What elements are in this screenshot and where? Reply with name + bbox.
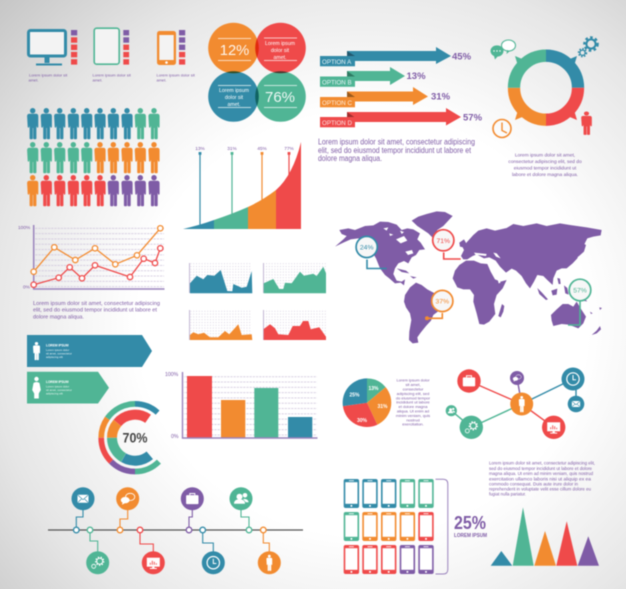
panel: bar chart — [165, 372, 318, 440]
caption: phone: Lorem ipsum dolor sit — [156, 72, 195, 78]
pin: 37%: 37% — [435, 298, 449, 306]
text: blue circle: amet. — [228, 102, 240, 108]
panel: phone grid — [344, 479, 487, 574]
text: pie paragraph: Lorem ipsum dolor — [396, 378, 430, 382]
stems and labels: 31% — [227, 146, 238, 152]
panel: small area charts — [190, 263, 326, 340]
ring: inner segments — [103, 405, 167, 470]
text: arrow paragraph: dolore magna aliqua. — [318, 154, 382, 163]
text: female banner — [46, 380, 72, 396]
panel: male banner — [27, 335, 152, 367]
timeline nodes — [74, 527, 266, 533]
icon: gears — [579, 37, 598, 57]
bracket — [436, 479, 448, 574]
area segments — [183, 142, 301, 229]
text: ring caption: labore et dolore magna aliqua. — [512, 172, 578, 178]
node: clock — [562, 368, 584, 390]
pie labels: 31% — [377, 404, 388, 410]
panel: ring with icons — [490, 37, 598, 178]
text: triangle paragraph: exercitation ullamco laboris nisi ut aliquip ex ea — [489, 476, 591, 481]
text: female banner: LOREM IPSUM — [46, 380, 69, 384]
stat: 25%: 25% — [454, 513, 486, 533]
text: female banner: Lorem ipsum dolor — [46, 384, 69, 388]
text: female banner: sit amet, consectetur — [46, 388, 72, 392]
pin: 57%: 57% — [573, 288, 587, 294]
panel: overlapping venn circles — [208, 23, 306, 122]
node: gears — [460, 416, 483, 439]
stat: 70%: 70% — [122, 431, 148, 446]
icon: smartphone — [157, 31, 176, 65]
caption: tablet: Lorem ipsum dolor sit — [92, 72, 131, 78]
text: triangle paragraph: commodo consequat. Duis aute irure dolor in — [489, 481, 578, 486]
pin: 24%: 24% — [360, 244, 374, 252]
text: arrow paragraph — [318, 138, 475, 163]
chart: green area — [264, 263, 326, 293]
squares: monitor legend — [71, 30, 77, 65]
text: blue circle: dolor sit — [225, 95, 244, 101]
panel: line chart — [18, 225, 164, 320]
pin: 57% — [568, 279, 591, 325]
arrow: option C — [320, 87, 451, 107]
text: triangle paragraph: magna aliqua. Ut enim ad minim veniam, quis nostrud — [489, 471, 593, 476]
text: pie paragraph — [396, 378, 431, 427]
panel: option arrows — [318, 47, 483, 163]
arrow: option B — [320, 67, 426, 87]
icon: mail — [72, 487, 94, 510]
ring chart — [514, 56, 578, 120]
connectors — [451, 378, 576, 427]
pin: 24% — [356, 236, 387, 268]
arrow: option D — [320, 108, 483, 127]
arrow: option A: OPTION A — [322, 59, 352, 66]
text: pie paragraph: consectetur — [403, 386, 424, 392]
text: ring caption: eiusmod tempor incididunt ut — [514, 166, 577, 172]
text: pie paragraph: aliqua. Ut enim ad — [397, 408, 429, 414]
stems and labels: 13% — [195, 146, 206, 152]
node: person hub — [510, 392, 533, 416]
text: male banner: adipiscing elit — [46, 355, 63, 359]
axis labels: 100% — [18, 226, 30, 231]
arrow: option D: 57% — [463, 112, 483, 124]
axes — [182, 372, 318, 438]
caption: monitor: amet. — [28, 78, 39, 82]
elbow connectors — [76, 510, 269, 552]
squares: tablet legend — [123, 30, 129, 65]
caption: tablet: amet. — [92, 78, 103, 82]
stat: 12%: 12% — [220, 42, 249, 59]
node: briefcase — [457, 369, 481, 393]
squares: phone legend — [179, 30, 185, 65]
text: pie paragraph: adipiscing elit, sed — [397, 391, 429, 396]
axis labels: 0% — [171, 434, 179, 440]
arrow: option B: 13% — [406, 71, 426, 82]
stems and labels: 77% — [284, 146, 295, 152]
pie labels: 30% — [357, 418, 368, 424]
phones — [344, 479, 434, 574]
label: lorem ipsum: LOREM IPSUM — [454, 533, 487, 539]
icon: person — [258, 551, 281, 574]
line: red series — [31, 246, 163, 287]
text: line chart paragraph: Lorem ipsum dolor sit amet, consectetur adipiscing — [33, 301, 160, 307]
icon: speech bubbles — [490, 40, 516, 60]
icon: chat — [116, 487, 139, 510]
text: pie paragraph: incididunt ut labore — [396, 400, 431, 405]
pin: 37% — [425, 290, 453, 320]
icon: desktop monitor — [28, 30, 66, 66]
text: line chart paragraph: dolore magna aliqua. — [33, 314, 84, 320]
map: continents — [335, 211, 602, 343]
arrow: option D: OPTION D — [322, 120, 352, 127]
text: male banner: LOREM IPSUM — [46, 344, 69, 348]
icon: red person — [581, 112, 592, 135]
arrow: option A — [320, 47, 472, 66]
caption: phone: amet. — [156, 78, 167, 82]
axis labels: 100% — [165, 372, 178, 378]
text: pie paragraph: et dolore magna — [399, 404, 428, 409]
text: arrow paragraph: Lorem ipsum dolor sit amet, consectetur adipiscing — [318, 138, 475, 146]
chart: blue area — [190, 263, 252, 293]
node: mail — [568, 396, 584, 412]
arrow: option C: 31% — [431, 92, 451, 102]
icon: clock — [202, 551, 225, 574]
panel: people pictogram — [27, 108, 160, 206]
text: female banner: adipiscing elit — [46, 392, 63, 396]
text: ring caption: Lorem ipsum dolor sit amet, — [515, 152, 575, 158]
grid — [35, 225, 164, 288]
arrow: option C: OPTION C — [322, 100, 352, 107]
pie labels: 13% — [368, 386, 379, 392]
text: male banner — [46, 344, 72, 359]
caption: monitor: Lorem ipsum dolor sit — [29, 72, 67, 78]
text: pie paragraph: do eiusmod tempor — [396, 395, 431, 400]
panel: triangle chart — [489, 460, 599, 566]
text: red circle: amet. — [274, 55, 286, 61]
pin: 71%: 71% — [436, 238, 450, 245]
text: red circle: dolor sit — [271, 48, 290, 54]
node: chat — [510, 371, 524, 385]
chart: orange area — [190, 310, 252, 340]
stems and labels — [195, 146, 295, 226]
panel: female banner — [27, 372, 109, 404]
text: triangle paragraph — [489, 460, 595, 496]
text: pie paragraph: exercitation. — [402, 422, 424, 427]
chart: red area — [264, 310, 326, 340]
text: triangle paragraph: Lorem ipsum dolor sit amet, consectetur adipiscing elit, — [489, 460, 595, 466]
text: line chart paragraph: elit, sed do eiusmod tempor incididunt ut labore et — [33, 308, 158, 314]
grid — [184, 372, 317, 437]
icon: clock — [493, 120, 511, 138]
text: arrow paragraph: elit, sed do eiusmod tempor incididunt ut labore et — [318, 146, 472, 155]
bars — [187, 376, 312, 438]
panel: pie chart — [343, 378, 431, 427]
timeline axis — [48, 529, 303, 531]
panel: timeline — [48, 487, 303, 574]
text: blue circle: Lorem ipsum — [219, 88, 249, 94]
icon: man — [33, 342, 40, 360]
stat: 76%: 76% — [265, 89, 295, 106]
stems and labels: 45% — [257, 146, 268, 152]
text: ring caption — [508, 152, 582, 178]
arrow: option B: OPTION B — [322, 80, 352, 86]
pie labels — [349, 386, 388, 424]
text: male banner: sit amet, consectetur — [46, 352, 72, 356]
text: male banner: Lorem ipsum dolor — [46, 348, 69, 352]
panel: rising curve chart — [183, 142, 301, 229]
text: triangle paragraph: fugiat nulla pariatur. — [489, 491, 526, 496]
panel: hub network — [446, 368, 584, 439]
text: pie paragraph: minim veniam, quis — [396, 413, 430, 418]
node: screen — [542, 416, 565, 439]
panel: radial progress — [87, 390, 183, 486]
icon: tablet — [94, 28, 119, 64]
pin: 71% — [433, 230, 461, 259]
text: red circle: Lorem ipsum — [265, 41, 295, 47]
axis labels: 0% — [23, 284, 31, 290]
text: ring caption: consectetur adipiscing elit, sed do — [508, 159, 582, 165]
panel: world map — [335, 211, 602, 343]
panel: device icons — [28, 28, 196, 82]
text: triangle paragraph: sed do eiusmod tempor incididunt ut labore et dolore — [489, 466, 592, 471]
axes — [34, 225, 165, 289]
pie — [343, 378, 391, 427]
text: triangle paragraph: reprehenderit in voluptate velit esse cillum dolore eu — [489, 486, 591, 491]
node: users — [446, 405, 457, 416]
ring: outer segments — [87, 390, 183, 486]
icon: gears — [86, 551, 109, 574]
ring notches — [515, 56, 577, 120]
text: line chart paragraph — [33, 301, 160, 320]
icon: users — [230, 487, 252, 510]
arrow: option A: 45% — [452, 52, 472, 62]
text: pie paragraph: sit amet, — [405, 382, 421, 387]
icon: briefcase — [181, 487, 204, 510]
icon: woman — [32, 377, 41, 398]
text: pie paragraph: nostrud — [406, 417, 420, 422]
icon: screen — [142, 551, 165, 574]
pie labels: 25% — [349, 392, 360, 398]
triangles — [491, 507, 599, 566]
line: orange series — [31, 226, 163, 274]
